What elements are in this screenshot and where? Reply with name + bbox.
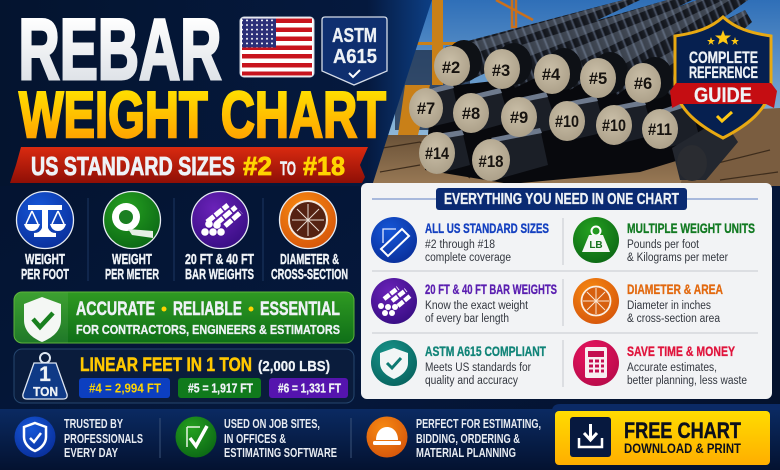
badge: complete reference guide shield	[670, 17, 777, 138]
trust item: professionals: PROFESSIONALS	[64, 431, 143, 446]
trust item: estimating: MATERIAL PLANNING	[416, 445, 516, 460]
top row bars	[445, 0, 752, 95]
trust item: professionals: EVERY DAY	[64, 445, 118, 460]
item: all US standard sizes: ALL US STANDARD SIZES	[425, 221, 549, 236]
item: bar weights: 20 FT & 40 FT BAR WEIGHTS	[425, 282, 557, 297]
item: diameter and area	[573, 278, 723, 325]
dark mass behind the bars	[425, 60, 712, 184]
icon: 1 ton weight: TON	[33, 384, 58, 399]
banner: accurate reliable essential: FOR CONTRACTORS, ENGINEERS & ESTIMATORS	[76, 322, 340, 337]
bar end labels: #5	[589, 70, 607, 88]
item: ASTM compliant: ASTM A615 COMPLIANT	[425, 344, 547, 359]
icon: shield check	[24, 297, 61, 342]
item: multiple weight units: LB	[589, 240, 603, 251]
panel heading	[436, 188, 687, 210]
feature icon: diameter and cross-section: DIAMETER &	[280, 252, 339, 268]
value: #4	[79, 378, 170, 398]
item: all US standard sizes: complete coverage	[425, 252, 511, 264]
item: ASTM compliant	[371, 340, 547, 387]
item: multiple weight units: Pounds per foot	[627, 239, 700, 251]
spare bar end at right	[672, 118, 738, 181]
trust item: job sites: ESTIMATING SOFTWARE	[224, 445, 337, 460]
value: #6	[269, 378, 348, 398]
bar end labels: #6	[634, 75, 652, 93]
item: bar weights: Know the exact weight	[425, 300, 529, 312]
trust item: estimating: BIDDING, ORDERING &	[416, 431, 520, 446]
trust item: estimating: PERFECT FOR ESTIMATING,	[416, 416, 541, 431]
button: free chart download	[555, 411, 770, 465]
value: #6: #6 = 1,331 FT	[278, 382, 341, 396]
feature icon: bar weights: 20 FT & 40 FT	[185, 252, 254, 268]
ribbon: US standard sizes	[10, 147, 368, 183]
feature icon: diameter and cross-section: CROSS-SECTION	[271, 267, 348, 283]
badge: ASTM A615	[322, 17, 387, 85]
trust item: estimating	[366, 416, 541, 460]
panel: linear feet in 1 ton: LINEAR FEET IN 1 TON	[80, 354, 252, 376]
banner: accurate reliable essential: RELIABLE	[173, 298, 242, 320]
bar end labels: #2	[442, 59, 460, 77]
item: save time and money	[573, 340, 747, 387]
feature icon: weight per foot: WEIGHT	[25, 252, 65, 268]
badge: complete reference guide shield: COMPLETE	[689, 49, 758, 67]
ribbon: US standard sizes: TO	[280, 159, 296, 180]
bar end labels: #18	[478, 153, 504, 171]
item: bar weights	[371, 278, 557, 325]
left navy overlay	[0, 0, 432, 186]
icon: download	[570, 417, 611, 457]
feature icon: weight per foot: PER FOOT	[21, 267, 69, 283]
button: free chart download: FREE CHART	[624, 418, 741, 443]
feature icon: weight per foot	[16, 192, 74, 283]
panel heading: EVERYTHING YOU NEED IN ONE CHART	[444, 191, 679, 208]
bar end labels: #10	[555, 113, 579, 131]
item: diameter and area: Diameter in inches	[627, 300, 711, 312]
bar end labels: #14	[425, 145, 450, 163]
bar end labels: #8	[462, 105, 480, 123]
item: all US standard sizes	[371, 217, 549, 264]
bar end labels: #11	[648, 121, 672, 139]
feature icon: weight per meter: WEIGHT	[112, 252, 152, 268]
hero photo: rebar bundle at construction site	[365, 0, 780, 186]
trust item: professionals: TRUSTED BY	[64, 416, 123, 431]
badge: complete reference guide shield: GUIDE	[694, 83, 752, 107]
item: diameter and area: & cross-section area	[627, 313, 721, 325]
feature icon: bar weights	[185, 192, 254, 283]
panel: everything you need in one chart	[361, 183, 772, 399]
item: save time and money: better planning, less waste	[627, 375, 747, 387]
value: #5: #5 = 1,917 FT	[188, 382, 253, 396]
ribbon: US standard sizes: #18	[303, 151, 345, 181]
bar end labels: #3	[492, 62, 510, 80]
banner: accurate reliable essential: ESSENTIAL	[260, 298, 340, 320]
footer band	[0, 404, 780, 470]
panel: linear feet in 1 ton: (2,000 LBS)	[258, 358, 330, 375]
trust item: job sites: USED ON JOB SITES,	[224, 416, 320, 431]
title: weight chart: WEIGHT CHART	[19, 78, 386, 151]
bar collars behind top row ends	[446, 40, 673, 99]
banner: accurate reliable essential	[14, 292, 354, 343]
banner: accurate reliable essential: ACCURATE	[76, 298, 155, 320]
item: all US standard sizes: #2 through #18	[425, 239, 495, 251]
badge: ASTM A615: ASTM	[332, 24, 377, 47]
panel: linear feet in 1 ton	[14, 349, 354, 403]
value: #5	[178, 378, 261, 398]
trust item: job sites: IN OFFICES &	[224, 431, 286, 446]
item: multiple weight units: & Kilograms per meter	[627, 252, 728, 264]
item: bar weights: of every bar length	[425, 313, 509, 325]
item: diameter and area: DIAMETER & AREA	[627, 282, 723, 297]
feature icon: weight per meter: PER METER	[105, 267, 159, 283]
item: save time and money: SAVE TIME & MONEY	[627, 344, 735, 359]
item: save time and money: Accurate estimates,	[627, 362, 717, 374]
bar end labels	[409, 46, 678, 181]
feature icon: weight per meter	[104, 192, 160, 283]
feature icon: diameter and cross-section	[271, 192, 348, 283]
lower row bar stubs	[426, 83, 700, 181]
badge: ASTM A615: A615	[333, 45, 377, 68]
bar end labels: #4	[542, 66, 561, 84]
trust item: professionals	[14, 416, 143, 460]
item: multiple weight units	[573, 217, 755, 264]
ribbon: US standard sizes: #2	[243, 151, 272, 181]
bar end labels: #10	[602, 117, 626, 135]
item: ASTM compliant: Meets US standards for	[425, 362, 531, 374]
item: ASTM compliant: quality and accuracy	[425, 375, 518, 387]
value: #4: #4 = 2,994 FT	[89, 382, 161, 396]
icon: 1 ton weight: 1	[39, 363, 51, 386]
feature icon: bar weights: BAR WEIGHTS	[185, 267, 254, 283]
bar end labels: #9	[510, 109, 528, 127]
icon: US flag	[240, 17, 314, 77]
ribbon: US standard sizes: US STANDARD SIZES	[31, 151, 235, 181]
title: rebar: REBAR	[18, 2, 222, 98]
bar end labels: #7	[417, 100, 435, 118]
icon: 1 ton weight	[23, 353, 67, 399]
trust item: job sites	[176, 416, 337, 460]
button: free chart download: DOWNLOAD & PRINT	[624, 441, 742, 456]
